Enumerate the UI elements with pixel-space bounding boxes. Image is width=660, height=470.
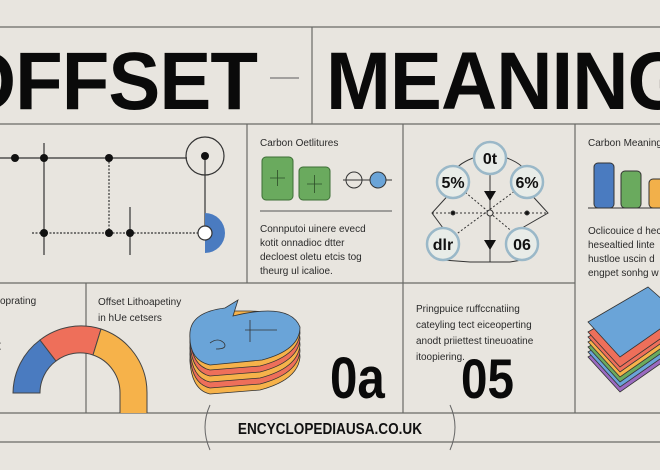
panel: carbon meaning bars: engpet sonhg w: [588, 268, 659, 279]
panel: layered blob: Offset Lithoapetiny: [98, 297, 181, 308]
panel: text and 05: 05: [461, 348, 514, 411]
panel: layered blob: [98, 297, 386, 411]
panel: text and 05: Pringpuice ruffccnatiing: [416, 304, 520, 315]
panel: layered blob: in hUe cetsers: [98, 313, 162, 324]
panel: percentage wheel: 5%: [441, 175, 465, 192]
panel: layered blob: 0a: [330, 346, 386, 411]
footer: [205, 405, 455, 450]
panel: percentage wheel: 0t: [483, 151, 498, 168]
panel: layer stack: [588, 287, 660, 392]
panel: carbon definitions: Carbon Oetlitures: [260, 138, 338, 149]
panel: text and 05: anodt priiettest tineuoatine: [416, 336, 534, 347]
panel: carbon definitions: [260, 138, 392, 277]
panel: text and 05: itoopiering.: [416, 352, 465, 363]
panel: carbon meaning bars: hustloe uscin d: [588, 254, 655, 265]
panel: carbon meaning bars: Carbon Meaning: [588, 138, 660, 149]
panel: percentage wheel: 6%: [515, 175, 539, 192]
panel: carbon definitions: kotit onnadioc dtter: [260, 238, 345, 249]
panel: carbon meaning bars: [588, 138, 660, 279]
panel: donut chart: oprating: [0, 296, 36, 307]
panel: percentage wheel: 06: [513, 237, 531, 254]
panel: text and 05: [416, 304, 534, 411]
panel: percentage wheel: dlr: [433, 237, 453, 254]
panel: carbon definitions: Connputoi uinere evecd: [260, 224, 366, 235]
title: [0, 35, 660, 126]
panel: text and 05: cateyling tect eiceoperting: [416, 320, 532, 331]
panel: carbon definitions: decloest oletu etcis tog: [260, 252, 362, 263]
panel: percentage wheel: [427, 142, 548, 262]
panel: donut chart: [0, 296, 148, 413]
panel: circuit diagram: [0, 137, 225, 255]
footer: ENCYCLOPEDIAUSA.CO.UK: [238, 421, 422, 438]
panel: carbon meaning bars: hesealtied linte: [588, 240, 655, 251]
panel: carbon definitions: theurg ul icalioe.: [260, 266, 333, 277]
